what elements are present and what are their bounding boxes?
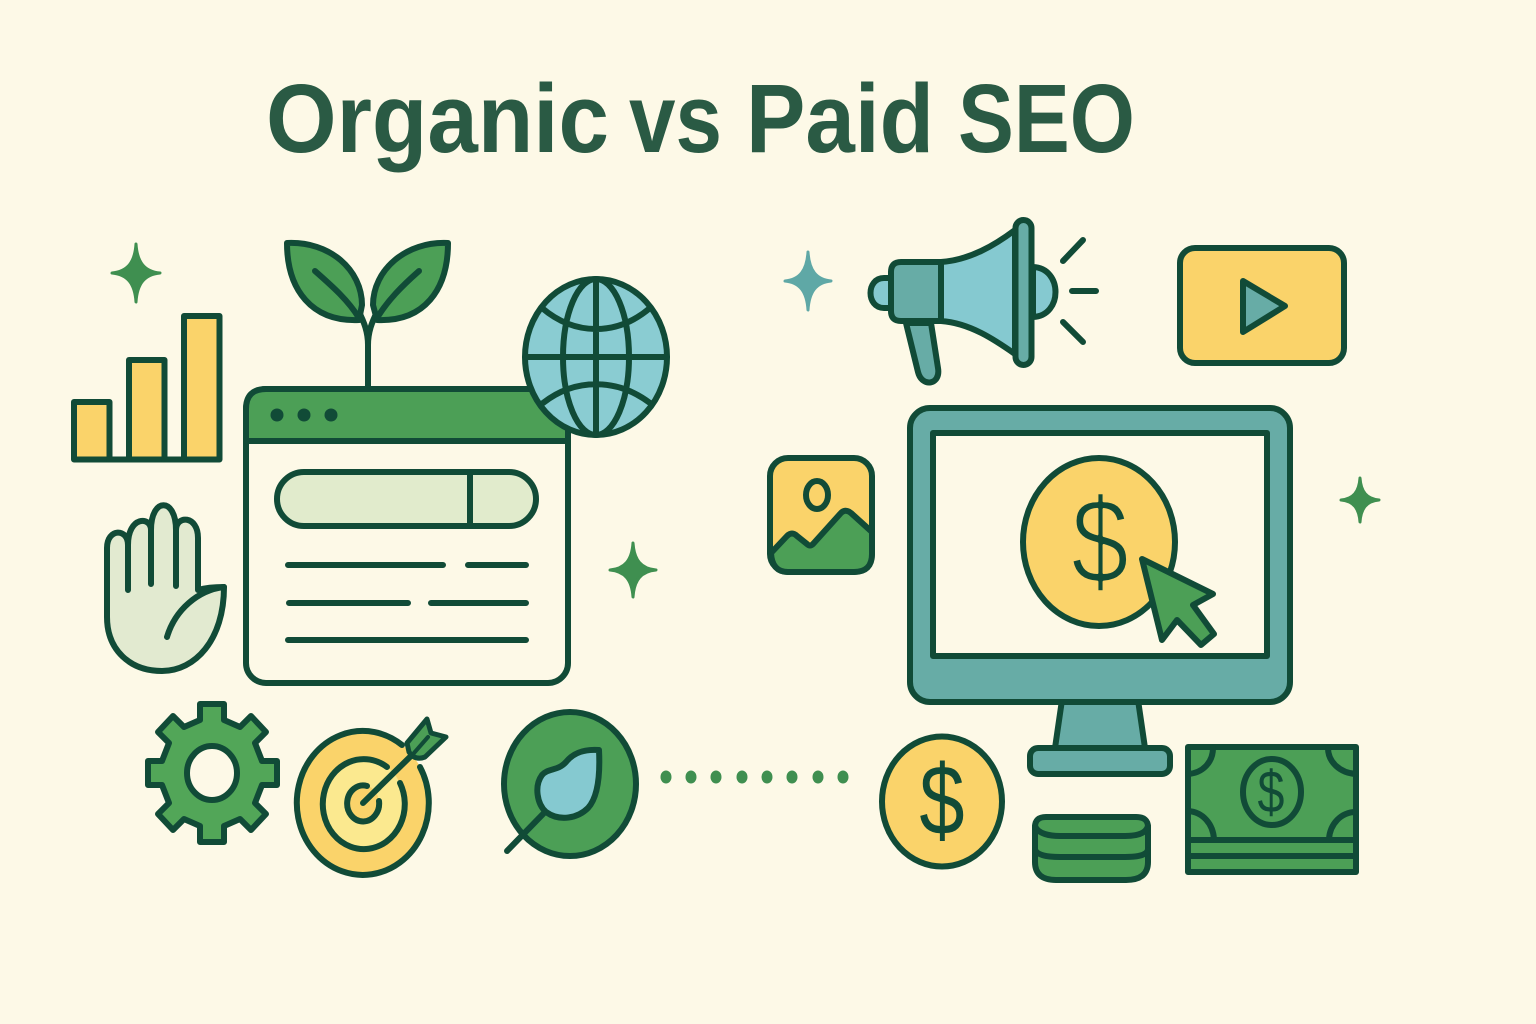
monitor stand: [1030, 700, 1170, 774]
panel: browser window: [246, 389, 568, 683]
panel: monitor: [910, 408, 1290, 774]
monitor screen: [933, 433, 1267, 656]
title: Paid: [746, 64, 934, 173]
icon: image: [770, 458, 872, 572]
dollar coin: $: [1071, 473, 1129, 609]
browser title bar: [246, 389, 568, 441]
icon: dollar coin bottom: $: [919, 745, 965, 856]
icon: globe: [525, 279, 667, 435]
text lines: [288, 565, 526, 640]
icon: sparkle mid left: [610, 543, 656, 597]
icon: leaf badge: [504, 712, 636, 856]
icon: video player: [1180, 248, 1344, 363]
icon: target: [297, 719, 446, 875]
search bar: [277, 472, 536, 526]
icon: banknote: [1188, 747, 1356, 872]
title: Organic: [266, 64, 609, 173]
icon: sparkle teal: [785, 252, 831, 310]
title: vs: [629, 64, 722, 173]
icon: coin stack: [1035, 817, 1148, 880]
icon: gear: [148, 704, 277, 842]
dotted connector: [660, 770, 848, 784]
monitor body: [910, 408, 1290, 702]
title: SEO: [958, 64, 1135, 173]
icon: sparkle right: [1341, 478, 1379, 522]
icon: dollar coin bottom: [882, 736, 1002, 866]
title: [266, 64, 1135, 173]
bar chart icon: [74, 316, 220, 460]
dollar coin: [1023, 458, 1175, 626]
browser dots: [270, 408, 338, 422]
icon: sparkle top left: [112, 244, 160, 302]
cursor arrow: [1142, 559, 1214, 645]
icon: sprout: [287, 243, 448, 386]
icon: hand: [107, 505, 224, 671]
icon: megaphone: [870, 220, 1096, 383]
icon: banknote: $: [1258, 760, 1284, 825]
